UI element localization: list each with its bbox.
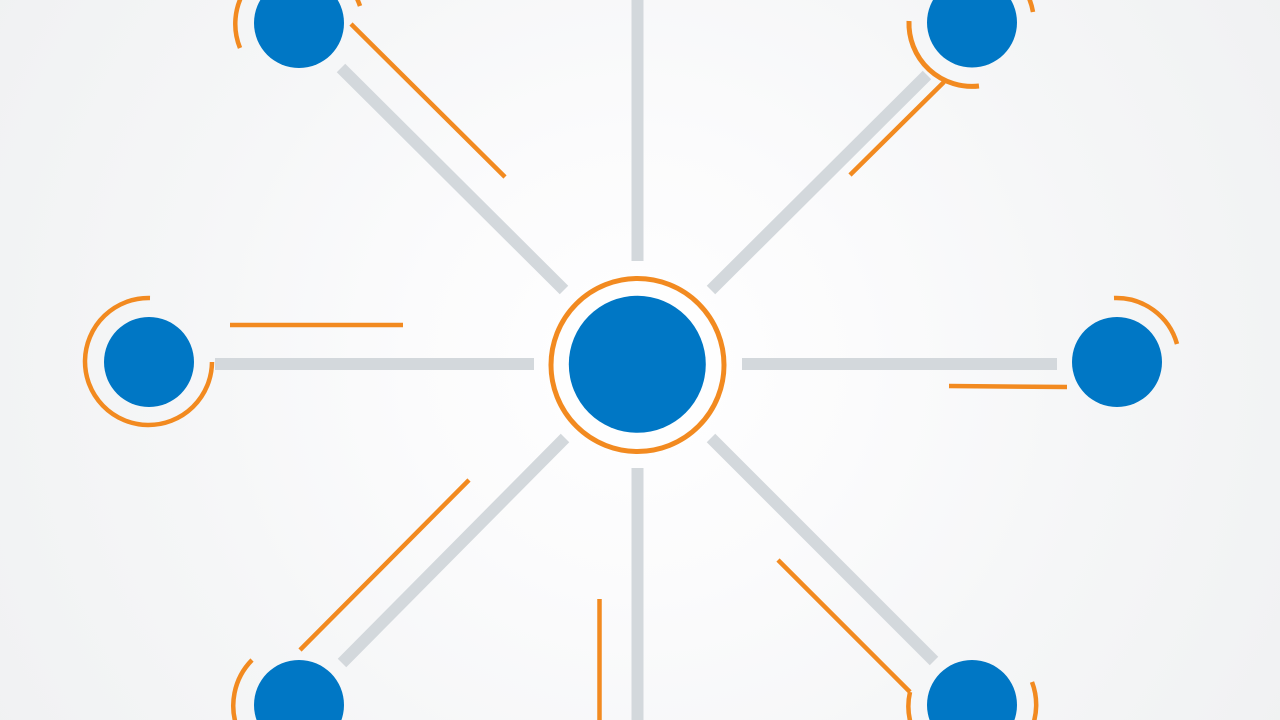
central hub <box>551 278 724 452</box>
node: left <box>85 298 212 425</box>
node: bottom right <box>908 660 1036 720</box>
node: top left <box>235 0 360 68</box>
node: right <box>1072 298 1177 407</box>
orange accent lines <box>230 24 1067 720</box>
node: top right <box>909 0 1033 86</box>
node: bottom left <box>233 660 344 720</box>
grey spokes <box>215 0 1057 720</box>
